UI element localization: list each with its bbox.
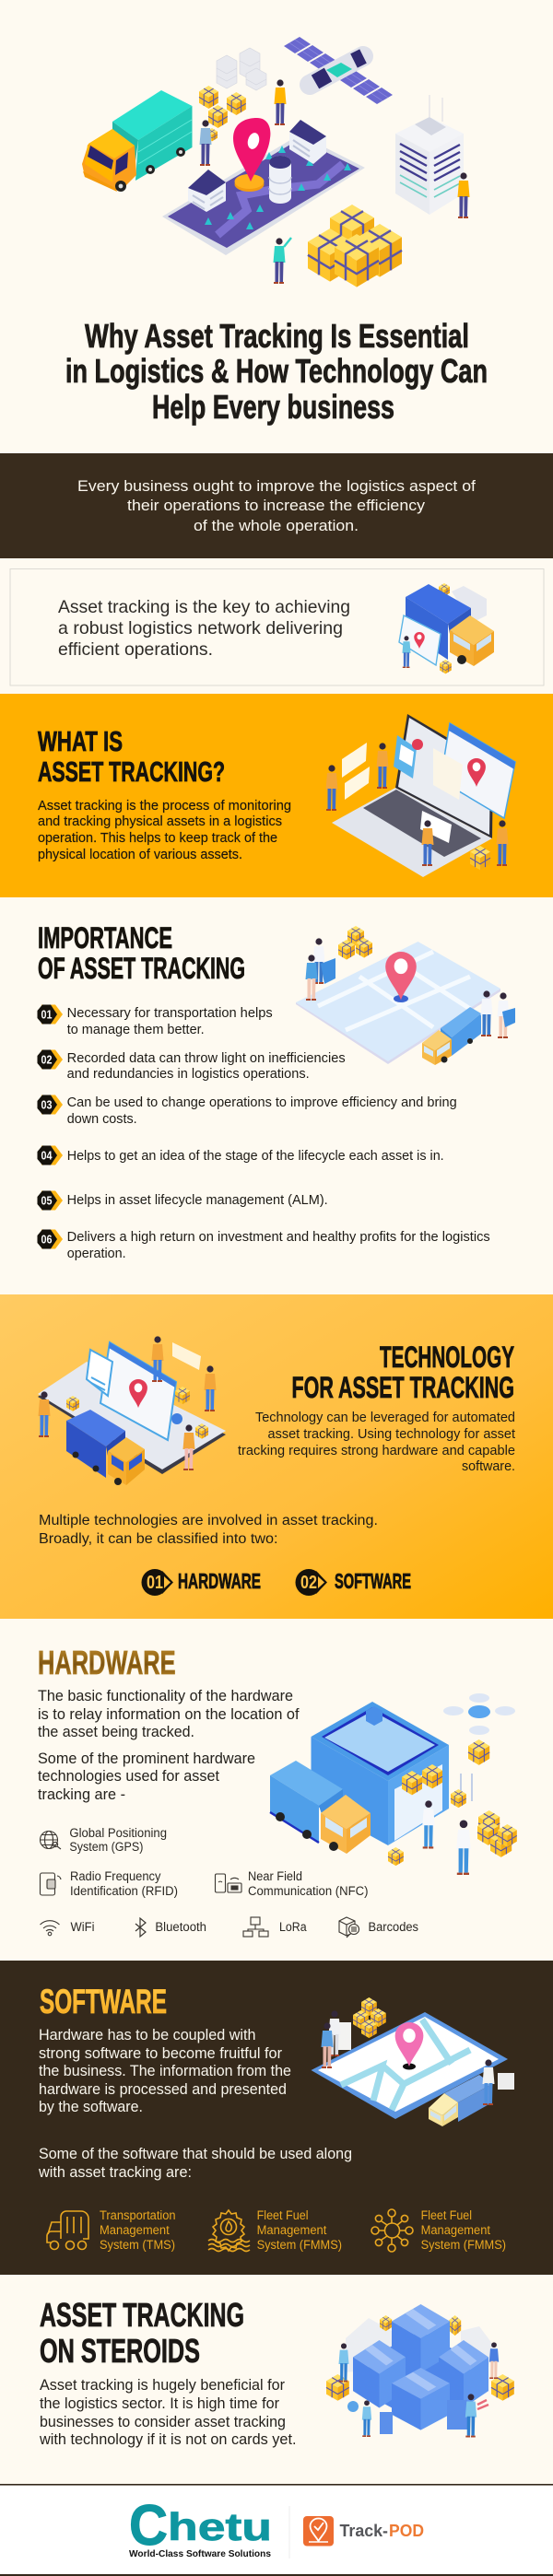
item: GPS bbox=[41, 1826, 167, 1854]
icon: small yellow boxes bbox=[199, 86, 246, 141]
icon: delivery truck with map bbox=[399, 583, 494, 673]
list item 02: and redundancies in logistics operations. bbox=[67, 1067, 310, 1082]
panel: footer logos bbox=[0, 2484, 553, 2576]
body text: The basic functionality of the hardware bbox=[38, 1688, 293, 1704]
item: FMMS 1 bbox=[208, 2208, 342, 2252]
list item 06: operation. bbox=[67, 1247, 126, 1261]
logo: Chetu: C bbox=[129, 2494, 168, 2558]
list item 01 bbox=[37, 1004, 273, 1037]
list item 02 bbox=[37, 1050, 346, 1082]
logo: Chetu: hetu bbox=[168, 2505, 272, 2548]
item: TMS: Transportation bbox=[100, 2208, 176, 2222]
item: LoRa bbox=[243, 1917, 307, 1937]
icon: satellite bbox=[284, 37, 393, 104]
icon: map illustration bbox=[312, 1997, 514, 2126]
body text: and tracking physical assets in a logistics bbox=[38, 814, 282, 829]
badge: software bbox=[295, 1569, 411, 1596]
logo: Track-POD bbox=[303, 2516, 424, 2547]
panel: importance of asset tracking bbox=[37, 921, 515, 1261]
list item 01: to manage them better. bbox=[67, 1023, 205, 1037]
intro text: Every business ought to improve the logistics aspect of bbox=[77, 477, 476, 495]
icon: truck bbox=[82, 90, 192, 192]
badge: software: 02 bbox=[300, 1573, 317, 1593]
item: TMS: Management bbox=[100, 2223, 170, 2237]
heading bbox=[291, 1341, 514, 1404]
panel: hardware bbox=[38, 1644, 517, 1938]
body text: Asset tracking is the process of monitoring bbox=[38, 799, 291, 814]
icon: warehouse illustration bbox=[270, 1693, 517, 1875]
item: RFID: Identification (RFID) bbox=[70, 1884, 178, 1898]
item: RFID bbox=[41, 1869, 178, 1898]
heading: WHAT IS bbox=[38, 725, 123, 757]
body text: Some of the prominent hardware bbox=[38, 1751, 255, 1767]
item: NFC bbox=[216, 1869, 369, 1898]
icon: cylinder database bbox=[269, 156, 291, 204]
body text: software. bbox=[462, 1459, 515, 1474]
badge: hardware: 01 bbox=[147, 1573, 163, 1593]
item: NFC: Communication (NFC) bbox=[248, 1884, 369, 1898]
item: Barcodes bbox=[339, 1917, 418, 1938]
body text: businesses to consider asset tracking bbox=[40, 2414, 286, 2430]
list item 03: down costs. bbox=[67, 1112, 137, 1127]
body text: with technology if it is not on cards yet. bbox=[39, 2431, 297, 2448]
list item 03 bbox=[37, 1095, 457, 1127]
icon: network hub bbox=[371, 2209, 413, 2252]
hero illustration bbox=[82, 37, 470, 287]
item: FMMS 2: Fleet Fuel bbox=[421, 2208, 472, 2222]
item: Bluetooth bbox=[135, 1918, 206, 1937]
title: Help Every business bbox=[152, 388, 394, 426]
icon: RFID phone bbox=[41, 1873, 61, 1895]
icon: server tower bbox=[395, 95, 464, 215]
item: WiFi bbox=[41, 1920, 94, 1936]
panel: technology for asset tracking bbox=[0, 1294, 553, 1619]
heading: OF ASSET TRACKING bbox=[38, 952, 245, 985]
list item 02: 02 bbox=[41, 1054, 53, 1067]
item: NFC: Near Field bbox=[248, 1869, 302, 1883]
body text: asset tracking. Using technology for asset bbox=[267, 1427, 515, 1442]
body text: technologies used for asset bbox=[38, 1768, 219, 1785]
classification text: Multiple technologies are involved in asset tracking. bbox=[39, 1513, 378, 1528]
list item 01: Necessary for transportation helps bbox=[67, 1006, 273, 1021]
list item 06: Delivers a high return on investment and healthy profits for the logistics bbox=[67, 1230, 490, 1245]
heading: IMPORTANCE bbox=[38, 921, 172, 954]
body text: the logistics sector. It is high time for bbox=[40, 2395, 279, 2412]
panel: hero bbox=[65, 37, 488, 426]
body text: tracking are - bbox=[38, 1786, 125, 1803]
body text: Technology can be leveraged for automated bbox=[255, 1411, 515, 1425]
heading: ASSET TRACKING bbox=[40, 2296, 244, 2334]
heading: SOFTWARE bbox=[40, 1983, 167, 2020]
classification text bbox=[39, 1513, 378, 1547]
icon: LoRa network bbox=[243, 1917, 268, 1937]
panel: key statement box bbox=[10, 569, 544, 685]
item: FMMS 1: Fleet Fuel bbox=[257, 2208, 308, 2222]
panel: software bbox=[0, 1961, 553, 2275]
title bbox=[65, 317, 488, 426]
body text bbox=[38, 1688, 300, 1803]
body text: the asset being tracked. bbox=[38, 1724, 194, 1740]
list item 06: 06 bbox=[41, 1233, 53, 1246]
body text bbox=[238, 1411, 515, 1474]
panel: asset tracking on steroids bbox=[39, 2296, 514, 2448]
body text: with asset tracking are: bbox=[38, 2164, 192, 2181]
intro text: of the whole operation. bbox=[194, 517, 359, 534]
icon: wifi bbox=[41, 1921, 59, 1936]
icon: bluetooth bbox=[135, 1918, 146, 1937]
icon: map illustration bbox=[296, 926, 515, 1065]
icon: phone illustration with truck bbox=[38, 1336, 226, 1485]
list item 03: Can be used to change operations to improve efficiency and bring bbox=[67, 1095, 457, 1110]
body text: tracking requires strong hardware and capable bbox=[238, 1444, 515, 1458]
statement text: a robust logistics network delivering bbox=[58, 618, 343, 638]
body text: operation. This helps to keep track of the bbox=[38, 831, 277, 846]
statement text: efficient operations. bbox=[58, 639, 213, 660]
item: TMS bbox=[47, 2208, 176, 2252]
logo: Track-POD: POD bbox=[389, 2522, 424, 2540]
heading bbox=[38, 921, 245, 985]
logo: Chetu: World-Class Software Solutions bbox=[129, 2548, 271, 2559]
heading bbox=[40, 2296, 244, 2370]
icon: truck outline bbox=[47, 2211, 88, 2250]
item: GPS: Global Positioning bbox=[69, 1826, 167, 1840]
body text: by the software. bbox=[39, 2099, 143, 2115]
heading bbox=[38, 725, 225, 788]
icon: people bbox=[199, 79, 470, 284]
icon: building right bbox=[289, 120, 326, 164]
logo: Chetu bbox=[129, 2494, 272, 2559]
badge: software: SOFTWARE bbox=[335, 1569, 411, 1593]
item: WiFi: WiFi bbox=[70, 1920, 94, 1934]
body text: Hardware has to be coupled with bbox=[39, 2027, 256, 2043]
heading: ASSET TRACKING? bbox=[38, 755, 225, 788]
list item 05 bbox=[37, 1190, 328, 1211]
list item 04: 04 bbox=[41, 1150, 53, 1163]
list item 04: Helps to get an idea of the stage of the lifecycle each asset is in. bbox=[67, 1149, 444, 1164]
list item 05: 05 bbox=[41, 1194, 53, 1207]
icon: blue boxes illustration bbox=[326, 2304, 514, 2438]
intro text: their operations to increase the efficiency bbox=[127, 497, 426, 514]
panel: what is asset tracking bbox=[0, 694, 553, 897]
body text: is to relay information on the location of bbox=[38, 1706, 300, 1723]
item: FMMS 1: Management bbox=[257, 2223, 327, 2237]
icon: fuel gear bbox=[208, 2210, 250, 2252]
icon: smartphone map bbox=[162, 135, 365, 255]
logo: Track-POD: Track- bbox=[339, 2522, 388, 2540]
item: TMS: System (TMS) bbox=[100, 2238, 175, 2252]
item: LoRa: LoRa bbox=[279, 1920, 307, 1934]
list item 03: 03 bbox=[41, 1098, 53, 1111]
icon: laptop illustration bbox=[326, 714, 515, 877]
panel: intro band bbox=[0, 453, 553, 558]
heading: HARDWARE bbox=[38, 1644, 176, 1681]
badge: hardware: HARDWARE bbox=[178, 1569, 261, 1593]
intro text bbox=[77, 477, 476, 534]
body text: hardware is processed and presented bbox=[39, 2081, 287, 2098]
item: FMMS 2 bbox=[371, 2208, 506, 2252]
item: FMMS 1: System (FMMS) bbox=[257, 2238, 342, 2252]
icon: server boxes bbox=[217, 48, 266, 90]
body text bbox=[38, 799, 291, 862]
icon: map pin bbox=[233, 118, 270, 192]
icon: barcode box bbox=[339, 1917, 359, 1938]
item: Bluetooth: Bluetooth bbox=[155, 1920, 206, 1934]
heading: ON STEROIDS bbox=[40, 2332, 200, 2370]
badge: hardware bbox=[142, 1569, 261, 1596]
item: GPS: System (GPS) bbox=[69, 1840, 143, 1854]
icon: NFC devices bbox=[216, 1874, 241, 1892]
body text bbox=[39, 2377, 297, 2448]
body text: Some of the software that should be used along bbox=[39, 2146, 352, 2162]
classification text: Broadly, it can be classified into two: bbox=[39, 1531, 278, 1547]
icon: globe bbox=[41, 1832, 61, 1849]
item: FMMS 2: System (FMMS) bbox=[421, 2238, 506, 2252]
list item 05: Helps in asset lifecycle management (ALM). bbox=[67, 1193, 328, 1208]
body text: Asset tracking is hugely beneficial for bbox=[40, 2377, 285, 2394]
item: Barcodes: Barcodes bbox=[369, 1920, 418, 1934]
icon: stack of boxes bbox=[308, 205, 402, 287]
list item 01: 01 bbox=[41, 1008, 53, 1021]
body text: physical location of various assets. bbox=[38, 848, 242, 862]
item: RFID: Radio Frequency bbox=[70, 1869, 161, 1883]
item: FMMS 2: Management bbox=[421, 2223, 490, 2237]
body text: the business. The information from the bbox=[39, 2063, 291, 2079]
statement text bbox=[58, 597, 350, 660]
statement text: Asset tracking is the key to achieving bbox=[58, 597, 350, 617]
list item 06 bbox=[37, 1229, 490, 1261]
body text: strong software to become fruitful for bbox=[39, 2045, 282, 2062]
list item 02: Recorded data can throw light on inefficiencies bbox=[67, 1051, 346, 1066]
icon: building left bbox=[188, 170, 226, 212]
body text bbox=[38, 2027, 352, 2181]
